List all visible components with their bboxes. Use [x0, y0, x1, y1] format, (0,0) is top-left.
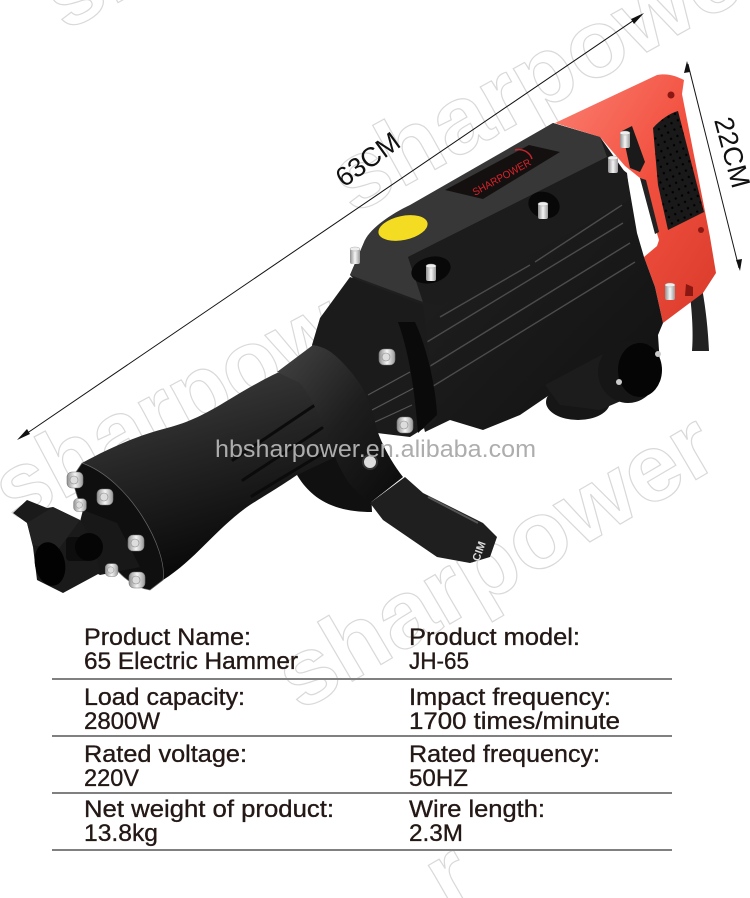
collar screw [363, 455, 377, 469]
nose bolts [67, 472, 145, 588]
dimension: length 63CM: 63CM [330, 126, 406, 193]
neck ribs [368, 372, 414, 422]
row 2 right: impact frequency: 1700 times/minute [409, 708, 620, 735]
row 4 right: wire length [409, 796, 545, 847]
nameplate with logo: SHARPOWER [471, 156, 534, 199]
ridges on body [422, 205, 635, 388]
barrel grooves [233, 405, 328, 496]
row 4 right: wire length: 2.3M [409, 820, 463, 847]
side handle: CIM [471, 540, 489, 563]
raised black plate [408, 157, 630, 305]
row 1 right: product model: JH-65 [409, 648, 469, 675]
row 1 left: product name [84, 624, 298, 675]
row 1 right: product model: Product model: [409, 624, 580, 651]
base dish and side knob [545, 341, 662, 420]
row 2 left: load capacity: Load capacity: [84, 684, 245, 711]
power cord [690, 288, 709, 351]
row 4 left: net weight: Net weight of product: [84, 796, 334, 823]
nameplate with logo [445, 145, 560, 199]
dimension: height 22CM [684, 61, 750, 271]
row 3 left: rated voltage: 220V [84, 765, 139, 792]
trigger [622, 126, 645, 172]
bolt recesses [408, 187, 563, 288]
row 1 left: product name: Product Name: [84, 624, 251, 651]
row 2 left: load capacity: 2800W [84, 708, 160, 735]
row 4 left: net weight: 13.8kg [84, 820, 158, 847]
top cover [350, 123, 607, 302]
row 2 left: load capacity [84, 684, 245, 735]
row 1 right: product model [409, 624, 580, 675]
nose assembly [13, 500, 140, 593]
row 1 left: product name: 65 Electric Hammer [84, 648, 298, 675]
row 3 right: rated frequency: Rated frequency: [409, 741, 600, 768]
row 3 left: rated voltage: Rated voltage: [84, 741, 247, 768]
yellow label [376, 211, 430, 245]
row 2 right: impact frequency [409, 684, 620, 735]
barrel front flange [72, 463, 163, 590]
red handle [555, 74, 716, 323]
neck bolts [379, 349, 413, 433]
website watermark: hbsharpower.en.alibaba.com [215, 436, 536, 463]
half disc below barrel [297, 450, 372, 512]
row 3 right: rated frequency: 50HZ [409, 765, 468, 792]
main barrel [82, 370, 350, 588]
neck between collars [312, 277, 437, 437]
row 4 right: wire length: Wire length: [409, 796, 545, 823]
front ring of body [398, 322, 437, 433]
specification table [52, 624, 672, 851]
black dotted grip [653, 111, 704, 230]
side handle [370, 477, 497, 563]
row 3 left: rated voltage [84, 741, 247, 792]
black strip inside handle [640, 178, 659, 234]
body bolts [350, 131, 675, 300]
main motor body [350, 123, 663, 432]
collar band [277, 345, 403, 503]
red handle rear holes [668, 92, 704, 296]
row 3 right: rated frequency [409, 741, 600, 792]
row 2 right: impact frequency: Impact frequency: [409, 684, 611, 711]
watermark pattern: sharpower [257, 391, 733, 730]
dimension: length 63CM [17, 13, 644, 440]
row 4 left: net weight [84, 796, 334, 847]
